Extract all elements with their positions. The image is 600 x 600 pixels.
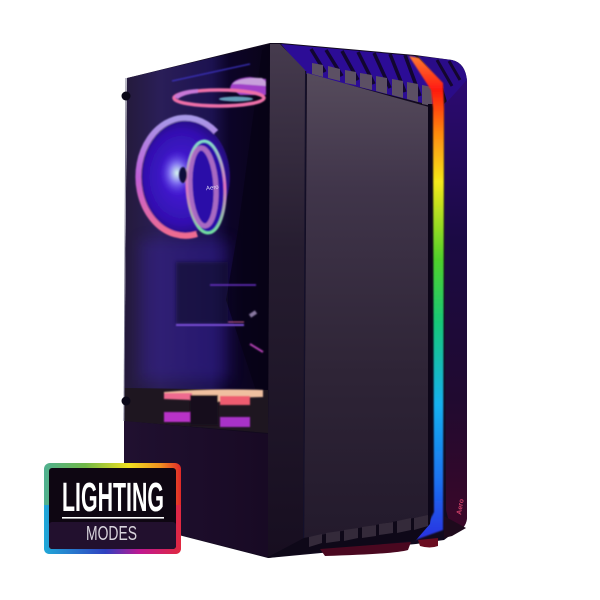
divider (62, 517, 164, 519)
case silhouette (124, 43, 467, 558)
glass panel (124, 44, 270, 435)
lower panel (124, 421, 268, 557)
front seam (303, 71, 305, 540)
thumbscrew top (122, 92, 130, 100)
case foot rear (418, 538, 438, 548)
subheading: MODES (86, 523, 137, 545)
bottom fans (164, 389, 263, 427)
top rear vents (418, 56, 467, 102)
main cpu fan (138, 118, 230, 236)
heading: LIGHTING (62, 474, 164, 520)
thumbscrew bottom (122, 396, 130, 406)
case foot front (320, 542, 411, 556)
pc case (122, 43, 467, 558)
bottom shroud (124, 388, 268, 435)
right side panel (444, 80, 467, 534)
badge bottom border (44, 505, 181, 554)
badge top border (44, 463, 181, 554)
top light streak (172, 64, 250, 81)
badge background (49, 468, 176, 549)
dark motherboard area (176, 262, 228, 324)
vent blocks (312, 63, 432, 106)
glass edge highlight (124, 78, 126, 421)
front column (268, 44, 305, 557)
brand logo: Aero (456, 498, 466, 515)
badge lower shade (49, 522, 176, 549)
top front vents (281, 44, 440, 106)
fan brand text: Aero (206, 184, 220, 192)
motherboard lines (176, 285, 263, 352)
strip shadow (428, 104, 434, 516)
glass reflection (226, 77, 270, 368)
top fans (174, 77, 266, 106)
cooler ring (179, 140, 227, 234)
badge: lighting modes (44, 463, 181, 554)
front panel (304, 73, 431, 538)
bottom vents (268, 515, 466, 558)
rgb light strip (409, 56, 444, 540)
